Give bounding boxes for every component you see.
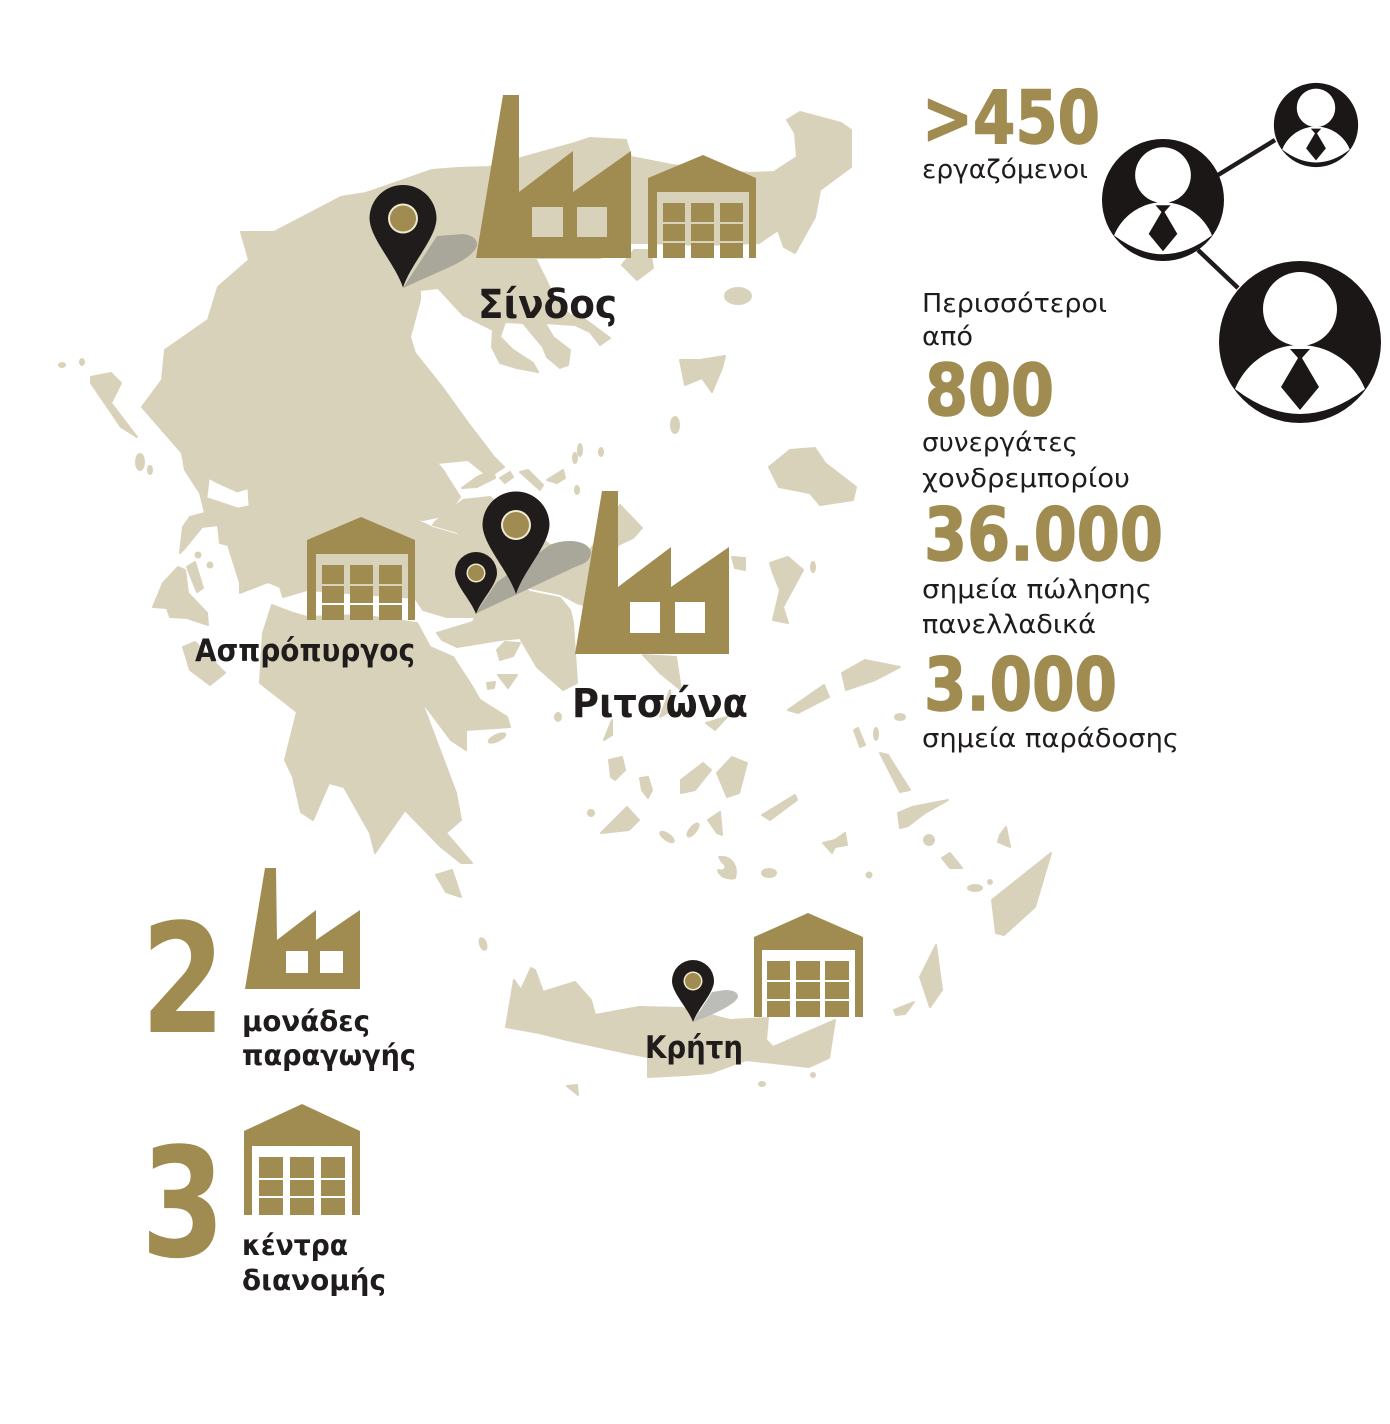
icon: small factory xyxy=(245,868,360,989)
stat: points of sale: πανελλαδικά xyxy=(922,610,1096,640)
island group: north and west xyxy=(59,250,856,685)
map pins: Ritsona and Aspropyrgos xyxy=(455,492,591,614)
network of people icons xyxy=(1102,83,1381,423)
stat: employees: εργαζόμενοι xyxy=(922,155,1088,185)
stat: production units: 2 xyxy=(141,891,225,1068)
icon: Ritsona factory xyxy=(575,491,729,654)
gulf of Amvrakikos xyxy=(208,480,248,507)
label: Aspropyrgos: Ασπρόπυργος xyxy=(195,633,415,669)
stat: points of sale xyxy=(922,493,1163,640)
stat: employees: >450 xyxy=(922,76,1100,161)
stat: delivery points: 3.000 xyxy=(924,643,1117,728)
icon: small warehouse xyxy=(244,1104,360,1215)
map of Greece xyxy=(59,112,1051,1095)
map pin: Sindos xyxy=(370,185,477,288)
icon: person large xyxy=(1219,261,1381,423)
Andros tail of Euboea xyxy=(643,655,681,690)
icon: Sindos warehouse xyxy=(648,155,756,258)
island: Crete xyxy=(506,968,835,1077)
icon: person small xyxy=(1274,83,1358,167)
stat: production units: παραγωγής xyxy=(242,1039,416,1072)
stat: wholesale partners: Περισσότεροι xyxy=(922,289,1107,319)
label: Crete: Κρήτη xyxy=(645,1030,743,1066)
icon: Aspropyrgos warehouse xyxy=(307,517,415,620)
stat: distribution centres: διανομής xyxy=(242,1264,386,1297)
icon: Crete warehouse xyxy=(754,913,863,1017)
map pin: Crete xyxy=(672,960,738,1022)
stat: delivery points xyxy=(922,643,1179,754)
mainland xyxy=(142,112,851,690)
stat: delivery points: σημεία παράδοσης xyxy=(922,724,1179,754)
stat: points of sale: σημεία πώλησης xyxy=(922,575,1152,605)
stat: employees xyxy=(922,76,1100,185)
icon: Sindos factory xyxy=(476,95,631,258)
stat: production units: μονάδες xyxy=(242,1005,370,1038)
stat: wholesale partners xyxy=(922,289,1130,494)
stat: wholesale partners: 800 xyxy=(925,349,1054,432)
Salamis xyxy=(497,642,520,660)
label: Ritsona: Ριτσώνα xyxy=(572,681,748,727)
Peloponnese xyxy=(260,605,510,863)
island group: Aegean xyxy=(436,557,1051,1095)
label: Sindos: Σίνδος xyxy=(478,282,617,328)
stat: distribution centres: κέντρα xyxy=(242,1229,348,1262)
stat: distribution centres xyxy=(141,1104,386,1297)
stat: production units xyxy=(141,868,416,1072)
stat: wholesale partners: συνεργάτες xyxy=(922,428,1078,458)
Euboea xyxy=(433,497,642,610)
icon: person medium xyxy=(1102,139,1224,261)
stat: points of sale: 36.000 xyxy=(924,493,1163,578)
stat: wholesale partners: από xyxy=(922,322,973,352)
stat: wholesale partners: χονδρεμπορίου xyxy=(922,464,1130,494)
stat: distribution centres: 3 xyxy=(141,1115,225,1292)
